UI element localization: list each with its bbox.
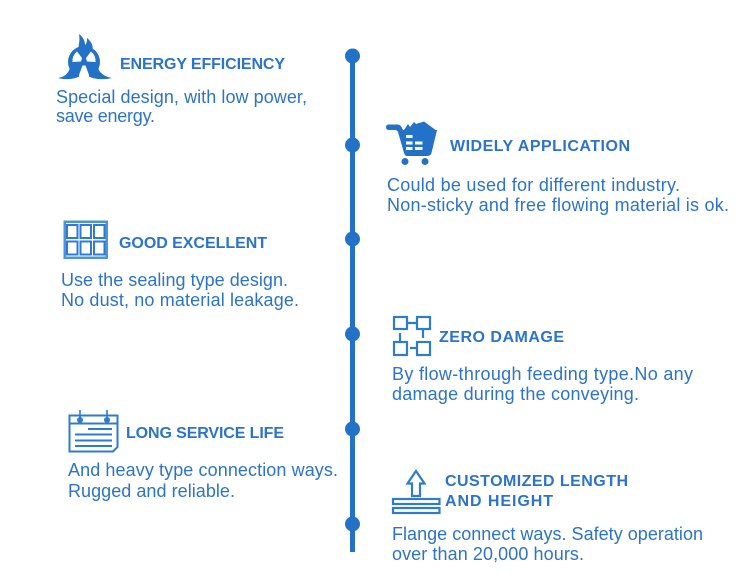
text block: save energy. bbox=[56, 106, 155, 126]
text block: Non-sticky and free flowing material is ok. bbox=[387, 195, 729, 215]
text block: over than 20,000 hours. bbox=[392, 544, 584, 564]
panel: zero damage bbox=[392, 317, 693, 404]
heading: ZERO DAMAGE bbox=[439, 329, 564, 346]
text block bbox=[392, 524, 703, 564]
text block: Use the sealing type design. bbox=[61, 270, 288, 290]
panel: long service life bbox=[68, 410, 338, 501]
heading: GOOD EXCELLENT bbox=[119, 235, 267, 252]
heading: AND HEIGHT bbox=[445, 493, 553, 510]
text block bbox=[387, 175, 729, 215]
icon: upload arrow bbox=[393, 471, 440, 513]
panel: customized length and height bbox=[392, 471, 703, 564]
icon: energy bbox=[58, 34, 112, 79]
panel: widely application bbox=[386, 122, 729, 215]
text block bbox=[61, 270, 299, 310]
text block bbox=[68, 460, 338, 501]
text block: By flow-through feeding type.No any bbox=[392, 364, 693, 384]
icon: grid bbox=[64, 220, 108, 259]
text block: Special design, with low power, bbox=[56, 87, 307, 107]
text block bbox=[56, 87, 307, 126]
text block: Flange connect ways. Safety operation bbox=[392, 524, 703, 544]
heading: ENERGY EFFICIENCY bbox=[120, 56, 285, 73]
icon: linked squares bbox=[394, 317, 430, 355]
timeline bbox=[345, 48, 360, 552]
text block: Could be used for different industry. bbox=[387, 175, 680, 195]
heading: LONG SERVICE LIFE bbox=[126, 425, 284, 442]
text block: Rugged and reliable. bbox=[68, 481, 235, 501]
icon: calendar bbox=[70, 410, 118, 452]
panel: good excellent bbox=[61, 220, 299, 310]
icon: cart bbox=[386, 122, 437, 165]
panel: energy efficiency bbox=[56, 34, 307, 126]
text block: damage during the conveying. bbox=[392, 384, 639, 404]
heading bbox=[445, 473, 628, 510]
heading: WIDELY APPLICATION bbox=[450, 138, 630, 155]
heading: CUSTOMIZED LENGTH bbox=[445, 473, 628, 490]
text block: No dust, no material leakage. bbox=[61, 290, 299, 310]
text block bbox=[392, 364, 693, 404]
text block: And heavy type connection ways. bbox=[68, 460, 338, 480]
